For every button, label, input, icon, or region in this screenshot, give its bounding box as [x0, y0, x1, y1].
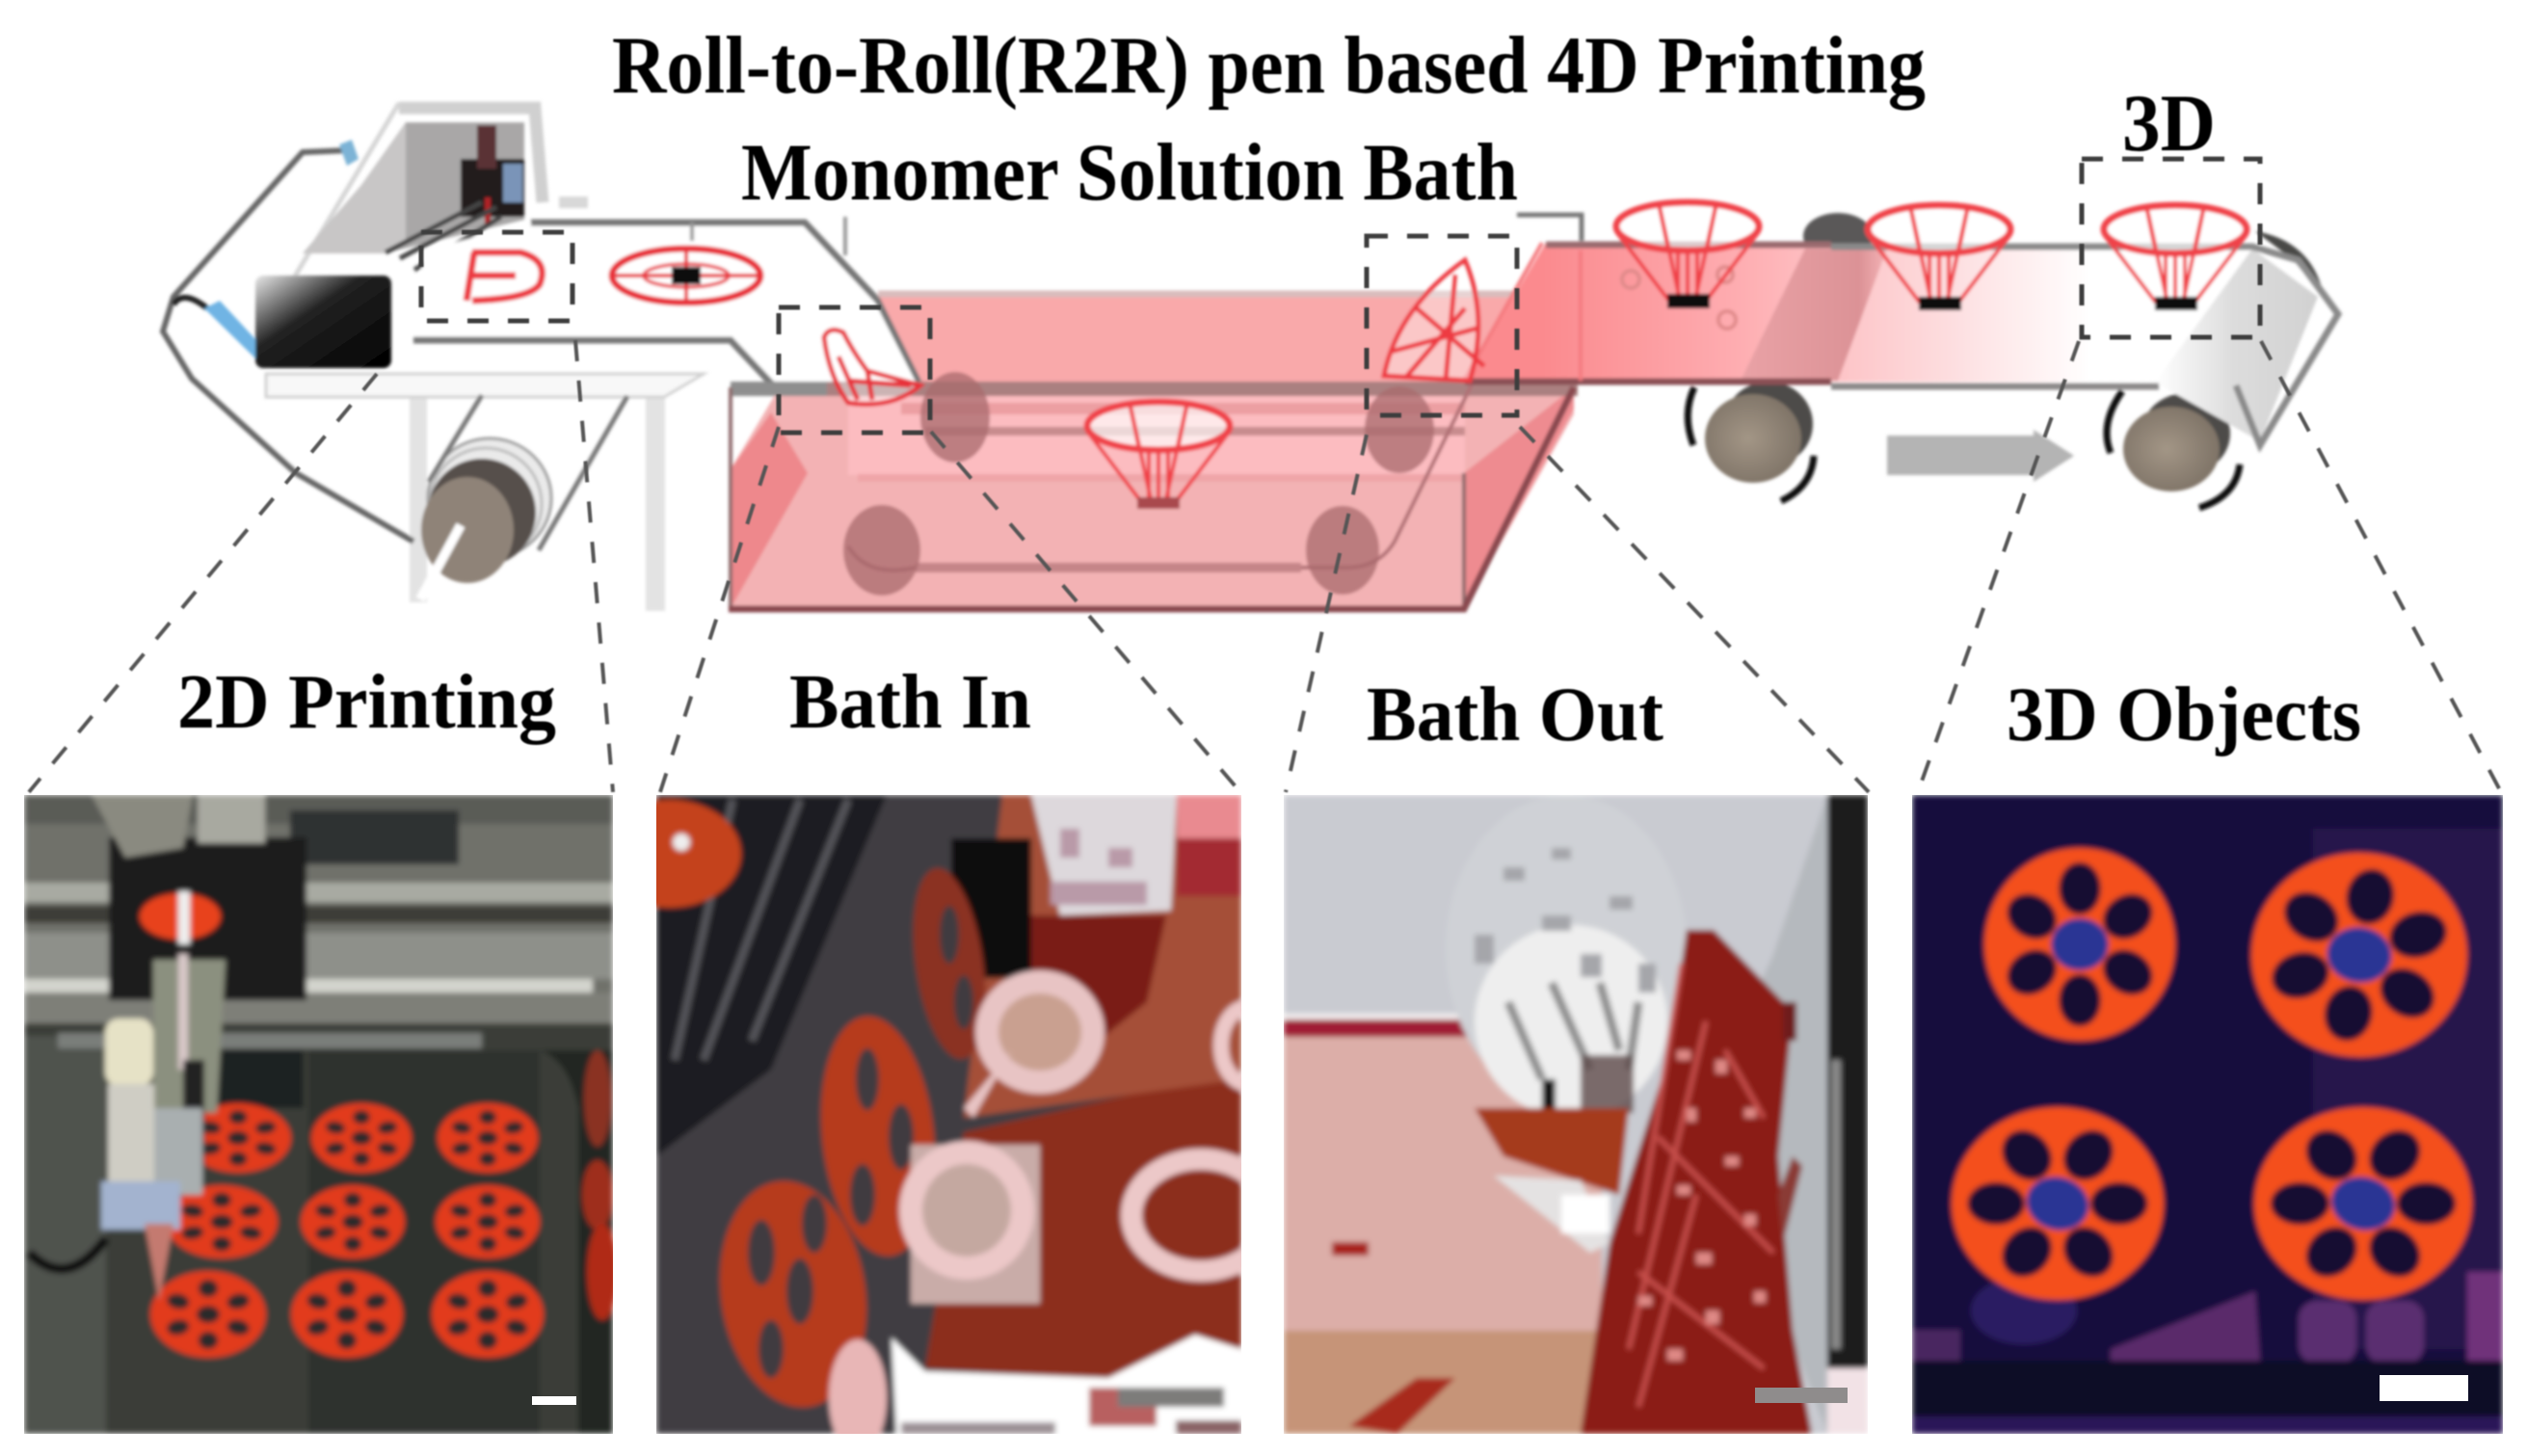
- pen holder and syringe: [101, 954, 226, 1301]
- photo panel: 3D objects: [1912, 795, 2512, 1434]
- cone in bath: [1087, 402, 1230, 499]
- heading: Bath Out: Bath Out: [1367, 673, 1663, 757]
- box: bath out: [1367, 236, 1517, 415]
- monomer solution tank: [729, 294, 1578, 609]
- direction arrow: [1887, 430, 2074, 482]
- heading: Bath In: Bath In: [789, 660, 1031, 745]
- 3D cones on film: [1616, 202, 2247, 310]
- partial wheel being printed: [466, 252, 542, 301]
- flat printed wheel: [612, 249, 761, 303]
- red-to-white exit film: [1464, 215, 2338, 445]
- scale bar: [532, 1396, 576, 1405]
- wheel folding at bath entry: [824, 330, 920, 405]
- box: bath in: [779, 307, 930, 433]
- leader lines: [29, 340, 2501, 792]
- film loop and bottom supply roll: [163, 140, 627, 599]
- photo panel: bath in: [656, 795, 1241, 1434]
- scale bar: [1755, 1388, 1848, 1403]
- upper and lower rollers: [1705, 213, 2325, 491]
- printed wheels grid: [150, 1050, 618, 1358]
- scale bar: [2380, 1375, 2468, 1401]
- heading: 3D Objects: 3D Objects: [2007, 673, 2361, 757]
- dashed zoom boxes and leader lines: [29, 159, 2501, 792]
- R2R process diagram: [163, 103, 2338, 611]
- title: Roll-to-Roll(R2R) pen based 4D Printing: [612, 20, 1926, 111]
- red printed tower: [1475, 930, 1812, 1434]
- box: 3D: [2082, 159, 2260, 337]
- white printing film: [413, 217, 922, 546]
- cone base in bath: [1137, 497, 1180, 509]
- foil ball: [1455, 846, 1671, 1116]
- orange wheels: [1913, 836, 2512, 1336]
- printer table and frame: [255, 103, 704, 611]
- tank rollers: [843, 372, 1434, 596]
- box: 2D printing: [421, 232, 572, 321]
- photo panel: 2D printing: [24, 795, 618, 1434]
- rotation arrows: [1688, 387, 2240, 508]
- photo panel: bath out: [1284, 795, 1868, 1434]
- pale wheels and film patches: [911, 982, 1275, 1304]
- wheel lifting at bath exit: [1384, 260, 1484, 381]
- heading: monomer bath: Monomer Solution Bath: [741, 127, 1518, 218]
- heading: 2D Printing: 2D Printing: [177, 660, 556, 745]
- tilted wheels: [656, 795, 991, 1412]
- heading: 3D: 3D: [2122, 78, 2216, 169]
